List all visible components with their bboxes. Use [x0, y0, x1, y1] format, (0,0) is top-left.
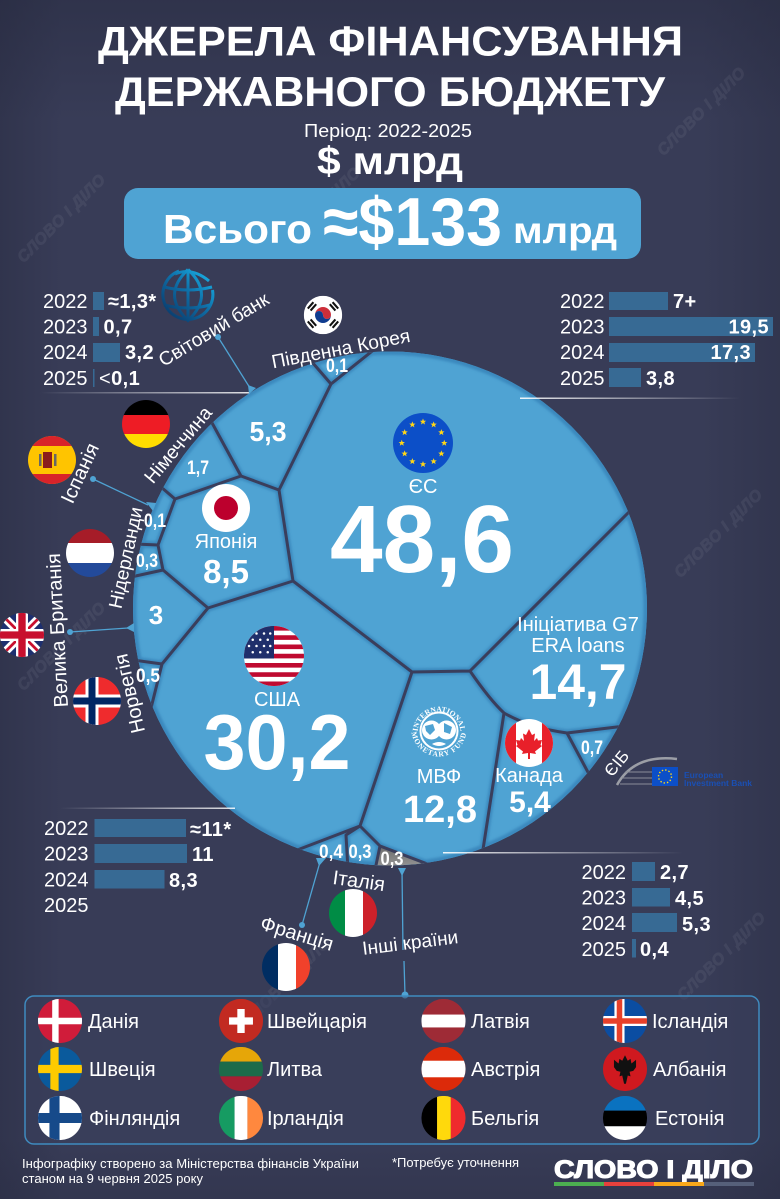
cell: Japan: Японія	[195, 531, 257, 553]
chart: World Bank by year: 2024	[43, 342, 88, 364]
label: EIB: ЄІБ	[600, 747, 633, 780]
cell: EU: ЄС	[409, 476, 437, 498]
cell: IMF	[403, 706, 477, 831]
icon: Italy flag	[329, 889, 377, 937]
cell: G7 ERA loans: ERA loans	[531, 635, 625, 657]
cell values: small: 5,3	[250, 416, 286, 447]
legend row: Lithuania	[219, 1047, 323, 1091]
legend row: Austria	[421, 1047, 540, 1091]
chart: World Bank by year: <0,1	[99, 368, 140, 390]
label: Norway: Норвегія	[110, 652, 150, 735]
chart: IMF by year: 5,3	[682, 914, 711, 936]
legend row: Sweden: Швеція	[89, 1059, 156, 1081]
total callout: млрд	[513, 210, 617, 251]
title: ДЕРЖАВНОГО БЮДЖЕТУ	[115, 68, 666, 115]
infographic: СЛОВО І ДІЛО	[14, 599, 109, 694]
label: South Korea: Південна Корея	[270, 326, 412, 373]
icon: Germany flag	[122, 400, 170, 448]
subtitle: unit: $ млрд	[317, 140, 463, 183]
legend row: Denmark	[38, 999, 139, 1043]
chart: USA by year: 2025	[44, 895, 88, 917]
cell values: small: 0,1	[144, 511, 166, 532]
cell: G7 ERA loans: 14,7	[530, 654, 626, 710]
infographic: СЛОВО І ДІЛО	[654, 64, 749, 159]
source note: Інфографіку створено за Міністерства фінансів України	[22, 1156, 359, 1171]
chart: USA by year: ≈11*	[190, 819, 232, 841]
legend row: Iceland: Ісландія	[652, 1011, 728, 1033]
legend row: Sweden	[38, 1047, 156, 1091]
chart: EU by year: 19,5	[728, 316, 769, 338]
logo: Slovo i Dilo: СЛОВО І ДІЛО	[554, 1156, 753, 1184]
cell: USA	[204, 626, 350, 786]
chart: World Bank by year: 0,7	[104, 316, 133, 338]
cell: Canada: 5,4	[509, 786, 551, 819]
chart: EU by year: 2023	[560, 316, 604, 338]
legend row: Albania: Албанія	[653, 1059, 726, 1081]
icon: European Investment Bank logo: Investment Bank	[684, 778, 752, 788]
icon: UK flag	[0, 613, 44, 657]
chart: USA by year: 2024	[44, 870, 88, 892]
icon: European Investment Bank logo	[617, 758, 752, 788]
chart: USA by year	[44, 808, 235, 917]
chart: USA by year: 11	[192, 844, 214, 866]
icon: South Korea flag	[304, 296, 342, 334]
chart: EU by year: 3,8	[646, 368, 675, 390]
cell values: small: 0,3	[380, 849, 404, 870]
cell: Canada	[495, 719, 564, 819]
cell values: small: 0,3	[136, 551, 158, 572]
label: Netherlands: Нідерланди	[106, 505, 148, 611]
cell values: small: 0,3	[348, 842, 372, 863]
chart: IMF by year: 2,7	[660, 862, 689, 884]
icon: Norway flag	[73, 677, 121, 725]
label: France: Франція	[258, 913, 336, 956]
title: ДЖЕРЕЛА ФІНАНСУВАННЯ	[98, 18, 683, 64]
footnote: *Потребує уточнення	[392, 1155, 519, 1170]
cell: Japan	[195, 484, 257, 590]
legend row: Albania	[603, 1047, 726, 1091]
chart: IMF by year: 0,4	[640, 939, 669, 961]
cell: Canada: Канада	[495, 765, 564, 787]
legend row: Estonia	[603, 1096, 724, 1140]
cell: EU: 48,6	[330, 486, 514, 593]
chart: World Bank by year: ≈1,3*	[108, 291, 157, 313]
cell: G7 ERA loans: Ініціатива G7	[517, 614, 639, 636]
legend row: Ireland	[219, 1096, 344, 1140]
label: other countries: Інші країни	[361, 927, 459, 960]
cell: IMF: МВФ	[417, 766, 461, 788]
chart: IMF by year	[443, 852, 711, 961]
infographic: СЛОВО І ДІЛО	[14, 171, 109, 266]
cell: IMF: INTERNATIONAL	[412, 706, 465, 732]
label: Spain: Іспанія	[57, 440, 104, 507]
cell: Japan: 8,5	[203, 553, 249, 590]
chart: USA by year: 8,3	[169, 870, 198, 892]
chart: IMF by year: 2023	[582, 888, 626, 910]
chart: EU by year	[520, 291, 773, 399]
legend row: Latvia: Латвія	[471, 1011, 530, 1033]
cell: G7 ERA loans	[517, 614, 639, 710]
icon: European Investment Bank logo: European	[684, 770, 723, 780]
chart: World Bank by year: 2025	[43, 368, 88, 390]
title	[98, 18, 683, 115]
cell: IMF: 12,8	[403, 789, 477, 831]
chart: World Bank by year: 2023	[43, 316, 88, 338]
chart: USA by year: 2022	[44, 818, 88, 840]
connector: Spain	[90, 476, 156, 511]
cell values: small: 1,7	[187, 458, 209, 479]
legend row: Estonia: Естонія	[655, 1108, 724, 1130]
chart: World Bank by year	[40, 291, 250, 394]
chart: EU by year: 17,3	[710, 342, 751, 364]
chart: IMF by year: 2022	[582, 862, 626, 884]
subtitle: period: Період: 2022-2025	[304, 121, 472, 141]
cell values: small: 0,4	[319, 842, 343, 863]
chart: USA by year: 2023	[44, 844, 88, 866]
chart: EU by year: 7+	[673, 291, 697, 313]
infographic: СЛОВО І ДІЛО	[671, 486, 766, 581]
legend row: Ireland: Ірландія	[267, 1108, 344, 1130]
cell values: small: 0,7	[581, 738, 603, 759]
cell values: small	[136, 356, 603, 870]
label: World Bank: Світовий банк	[155, 289, 274, 371]
total callout: ≈$133	[323, 184, 502, 260]
chart: IMF by year: 2024	[582, 913, 626, 935]
legend row: Switzerland: Швейцарія	[267, 1011, 367, 1033]
connector: World Bank	[215, 334, 256, 394]
legend row: Lithuania: Литва	[267, 1059, 323, 1081]
icon: France flag	[262, 943, 310, 991]
legend row: Denmark: Данія	[88, 1011, 139, 1033]
label: United Kingdom: Велика Британія	[43, 553, 73, 708]
connector: United Kingdom	[67, 623, 134, 635]
infographic: СЛОВО І ДІЛО	[239, 934, 334, 1029]
connector: other countries	[398, 868, 408, 998]
cell values: small: 0,1	[326, 356, 348, 377]
chart: World Bank by year: 3,2	[125, 342, 154, 364]
chart: EU by year: 2025	[560, 368, 604, 390]
voronoi circle chart	[133, 352, 647, 870]
infographic: СЛОВО І ДІЛО	[269, 164, 364, 259]
cell: other countries	[376, 848, 424, 866]
legend row: Switzerland	[219, 999, 367, 1043]
cell: EU	[330, 413, 514, 593]
source note	[22, 1156, 359, 1186]
cell: USA: США	[254, 689, 301, 711]
icon: Netherlands flag	[66, 529, 114, 577]
legend: other countries	[25, 996, 759, 1144]
label: Germany: Німеччина	[141, 403, 217, 488]
label: Italy: Італія	[331, 867, 386, 896]
chart: IMF by year: 2025	[582, 939, 626, 961]
connector: France	[299, 858, 326, 928]
legend row: Iceland	[603, 999, 728, 1043]
chart: IMF by year: 4,5	[675, 888, 704, 910]
legend row: Latvia	[421, 999, 530, 1043]
cell: USA: 30,2	[204, 698, 350, 786]
total callout: Всього	[163, 206, 312, 252]
total callout	[124, 184, 641, 260]
icon: World Bank globe	[163, 270, 213, 320]
legend row: Finland: Фінляндія	[89, 1108, 180, 1130]
chart: EU by year: 2022	[560, 291, 604, 313]
chart: EU by year: 2024	[560, 342, 604, 364]
source note: станом на 9 червня 2025 року	[22, 1171, 203, 1186]
legend row: Belgium: Бельгія	[471, 1108, 539, 1130]
chart: World Bank by year: 2022	[43, 291, 88, 313]
cell: IMF: MONETARY FUND	[411, 731, 466, 757]
infographic: СЛОВО І ДІЛО	[674, 909, 769, 1004]
icon: Spain flag	[28, 436, 76, 484]
legend row: Finland	[38, 1096, 180, 1140]
legend row: Austria: Австрія	[471, 1059, 540, 1081]
cell values: small: 3	[149, 600, 163, 630]
legend row: Belgium	[421, 1096, 539, 1140]
cell values: small: 0,5	[136, 666, 160, 687]
